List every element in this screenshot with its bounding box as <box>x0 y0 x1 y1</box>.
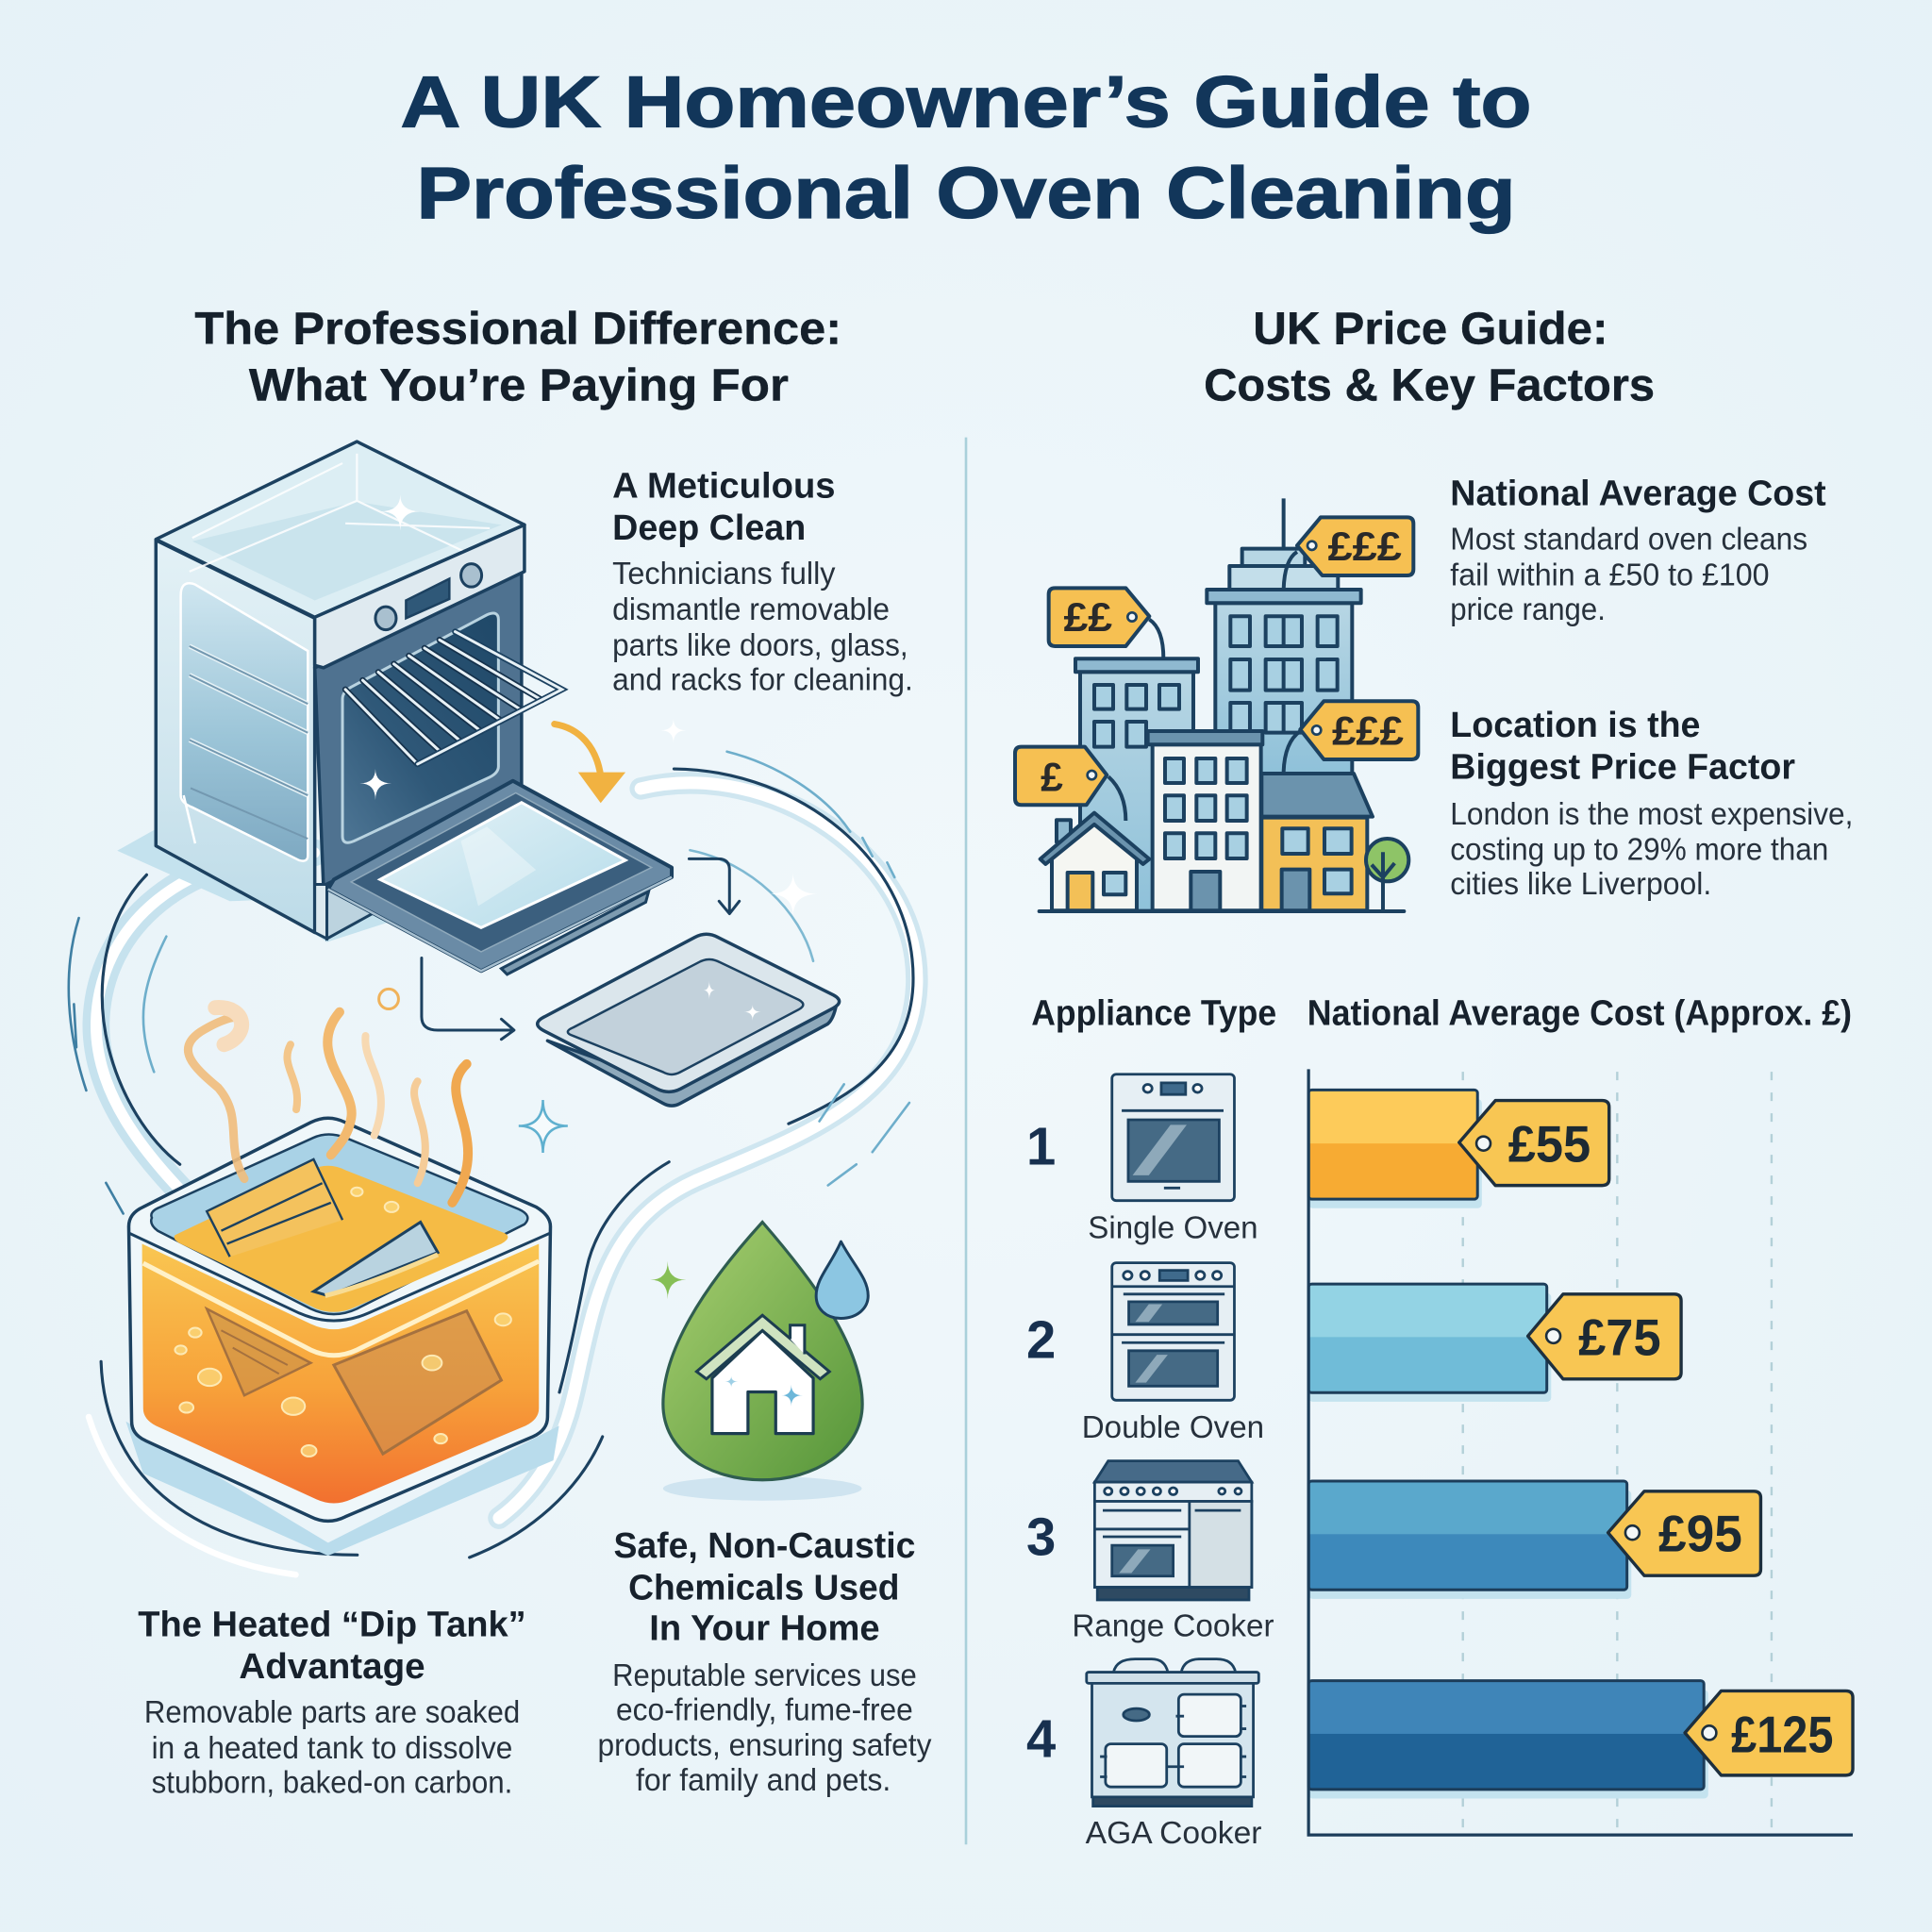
liquid body <box>142 1243 539 1504</box>
text: location <box>1450 706 1853 902</box>
row numbers <box>1026 1116 1056 1769</box>
row numbers: 2 <box>1026 1309 1056 1369</box>
price tag: £ <box>1015 747 1107 805</box>
text: safe chemicals: products, ensuring safety <box>597 1728 932 1763</box>
price tag: ££: ££ <box>1063 595 1112 641</box>
heading: the professional difference <box>194 303 841 410</box>
text: dip tank: The Heated “Dip Tank” <box>138 1606 526 1645</box>
text: dip tank <box>138 1606 526 1800</box>
green sparkle <box>650 1261 686 1299</box>
oven control panel <box>315 525 525 668</box>
sparkle <box>359 769 391 800</box>
icon: double oven <box>1112 1263 1234 1400</box>
arrow: rack to door, orange <box>555 724 625 803</box>
text: location: Biggest Price Factor <box>1450 747 1795 787</box>
text: safe chemicals: In Your Home <box>649 1608 880 1648</box>
tank body <box>128 1118 550 1521</box>
title <box>400 62 1532 234</box>
heading: the professional difference: The Professional Difference: <box>194 303 841 354</box>
bar: single oven <box>1308 1090 1482 1208</box>
text: meticulous deep clean: dismantle removable <box>612 592 890 627</box>
sparkle <box>519 1100 568 1153</box>
text: national average cost: fail within a £50 to £100 <box>1450 558 1770 592</box>
eco drop shadow <box>663 1476 862 1501</box>
ground line <box>1040 906 1404 917</box>
price tag: top £££: £££ <box>1327 525 1402 570</box>
row numbers: 1 <box>1026 1116 1056 1175</box>
icon: single oven <box>1112 1074 1234 1201</box>
text: meticulous deep clean: A Meticulous <box>612 467 836 507</box>
left tower <box>1075 658 1198 911</box>
title: A UK Homeowner’s Guide to <box>400 62 1532 143</box>
arrow: to tray elbow <box>422 958 514 1040</box>
chart column headers <box>1031 994 1852 1034</box>
icon: range cooker <box>1094 1461 1252 1600</box>
tank shadow <box>125 1422 559 1556</box>
text: safe chemicals: Safe, Non-Caustic <box>613 1526 915 1566</box>
eco drop <box>663 1222 862 1480</box>
chart column headers: Appliance Type <box>1031 994 1276 1034</box>
appliance labels: Single Oven <box>1088 1211 1258 1246</box>
text: national average cost: National Average Cost <box>1450 475 1826 514</box>
submerged parts <box>207 1308 501 1454</box>
text: meticulous deep clean <box>612 467 913 697</box>
price tag: top £££ <box>1297 517 1413 575</box>
bar: range cooker <box>1308 1481 1631 1599</box>
parts in liquid <box>207 1159 438 1296</box>
illustration: oven with door open <box>117 441 840 1106</box>
text: meticulous deep clean: parts like doors, glass, <box>612 628 908 663</box>
text: national average cost: Most standard oven cleans <box>1450 523 1807 558</box>
bar: AGA cooker <box>1308 1681 1708 1799</box>
illustration: city with price tags <box>1015 498 1418 911</box>
text: dip tank: in a heated tank to dissolve <box>152 1731 512 1766</box>
sparkles <box>660 718 819 917</box>
liquid surface <box>175 1166 508 1312</box>
icon: AGA cooker <box>1087 1659 1258 1807</box>
small ring <box>379 989 398 1009</box>
bar value: £95: £95 <box>1658 1504 1742 1562</box>
text: meticulous deep clean: Deep Clean <box>612 508 806 548</box>
oven floor shadow <box>117 829 408 942</box>
text: location: London is the most expensive, <box>1450 797 1853 832</box>
title: Professional Oven Cleaning <box>416 153 1516 234</box>
text: safe chemicals: Chemicals Used <box>628 1568 899 1607</box>
bubbles <box>175 1188 511 1457</box>
text: location: cities like Liverpool. <box>1450 867 1711 902</box>
yellow house <box>1261 774 1373 910</box>
text: national average cost: price range. <box>1450 592 1606 627</box>
price tag: ££ <box>1049 588 1149 646</box>
illustration: heated dip tank <box>125 989 868 1556</box>
water droplet <box>816 1241 868 1318</box>
text: safe chemicals: Reputable services use <box>612 1658 917 1693</box>
price tag: £: £ <box>1041 755 1063 800</box>
steam <box>188 1008 468 1203</box>
bar value: £75: £75 <box>1578 1308 1661 1367</box>
tall tower <box>1207 498 1361 774</box>
text: meticulous deep clean: and racks for cleaning. <box>612 662 913 697</box>
tree <box>1366 839 1408 910</box>
price tag: lower £££: £££ <box>1332 708 1404 754</box>
tag strings <box>1108 552 1300 821</box>
white apartment block <box>1148 731 1262 910</box>
heading: UK price guide <box>1204 303 1655 410</box>
row numbers: 4 <box>1026 1709 1056 1769</box>
flow swirls around illustrations <box>69 752 917 1574</box>
text: national average cost <box>1450 475 1826 627</box>
text: location: costing up to 29% more than <box>1450 833 1828 868</box>
appliance labels: AGA Cooker <box>1086 1816 1261 1851</box>
appliance labels <box>1072 1211 1274 1851</box>
bar value: £125: £125 <box>1731 1705 1834 1763</box>
row numbers: 3 <box>1026 1507 1056 1566</box>
house on drop <box>696 1315 829 1434</box>
oven front face <box>315 572 522 939</box>
bar: double oven <box>1308 1284 1551 1402</box>
oven door <box>328 781 672 974</box>
bar chart <box>1087 1069 1853 1835</box>
chart column headers: National Average Cost (Approx. £) <box>1307 994 1852 1034</box>
tank back wall <box>151 1134 527 1314</box>
text: location: Location is the <box>1450 706 1700 745</box>
tags <box>1459 1101 1853 1775</box>
text: meticulous deep clean: Technicians fully <box>612 557 836 591</box>
oven rack <box>345 632 562 764</box>
bar value: £55: £55 <box>1508 1115 1591 1174</box>
heading: UK price guide: UK Price Guide: <box>1253 303 1607 354</box>
text: dip tank: Advantage <box>239 1647 425 1687</box>
axes <box>1308 1069 1853 1835</box>
appliance labels: Double Oven <box>1082 1410 1264 1445</box>
text: dip tank: Removable parts are soaked <box>144 1695 520 1730</box>
appliance labels: Range Cooker <box>1072 1609 1274 1644</box>
text: dip tank: stubborn, baked-on carbon. <box>152 1765 512 1800</box>
heading: the professional difference: What You’re Paying For <box>249 359 789 410</box>
oven top <box>156 441 525 617</box>
oven tray <box>538 934 840 1106</box>
text: safe chemicals <box>597 1526 932 1798</box>
price tag: lower £££ <box>1300 701 1418 759</box>
front rim <box>143 1261 539 1356</box>
arrow: door to tray <box>689 858 740 914</box>
oven side panel <box>156 541 315 932</box>
text: safe chemicals: eco-friendly, fume-free <box>616 1692 913 1727</box>
small house <box>1041 813 1149 910</box>
heading: UK price guide: Costs & Key Factors <box>1204 359 1655 410</box>
text: safe chemicals: for family and pets. <box>636 1763 891 1798</box>
